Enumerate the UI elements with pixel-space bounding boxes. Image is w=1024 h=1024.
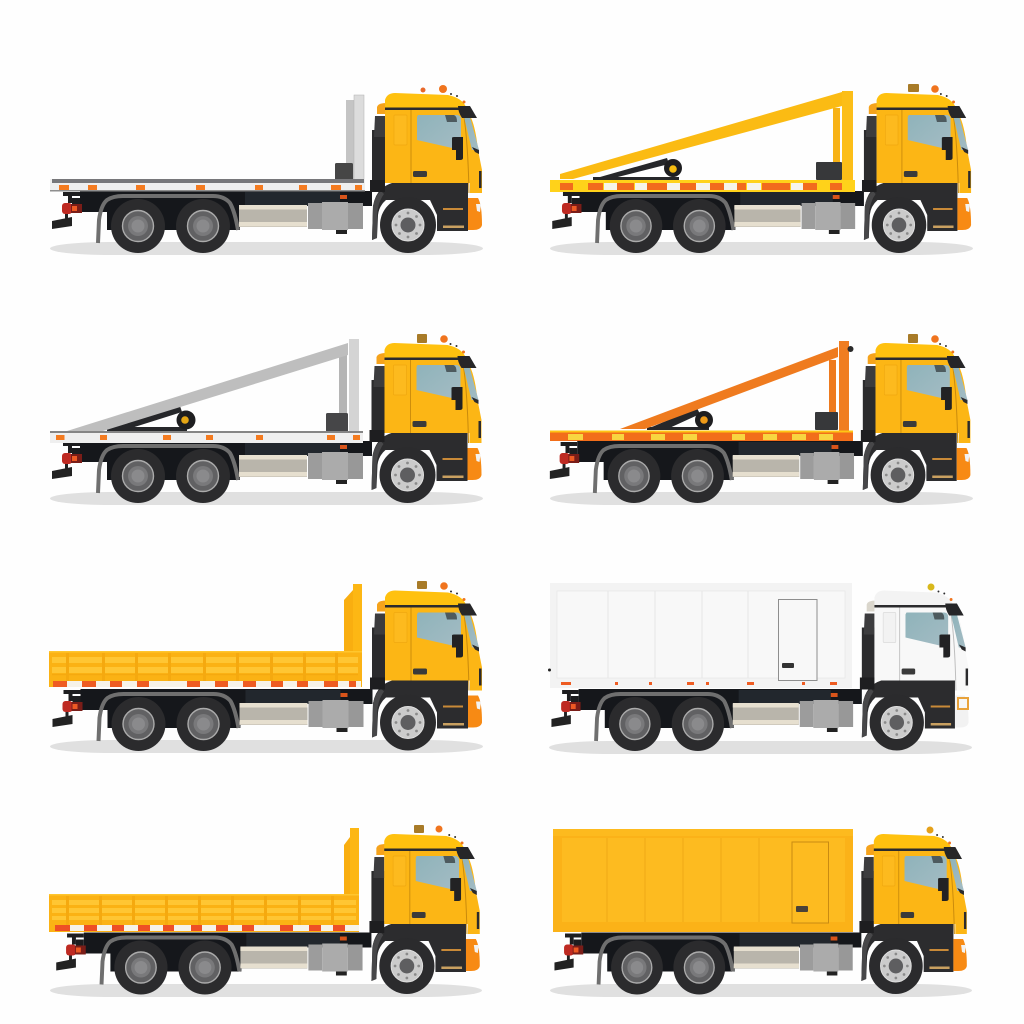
chassis and rear wheels: [551, 689, 862, 751]
truck: silver flatbed with headboard: [50, 85, 483, 255]
dropside body: [49, 584, 362, 687]
chassis and rear wheels: [552, 191, 864, 253]
chassis and rear wheels: [554, 932, 861, 994]
chassis and rear wheels: [550, 441, 863, 503]
tilt boom and deck: [550, 91, 855, 192]
ground shadow: [550, 984, 972, 997]
truck: white box van: [548, 583, 972, 754]
cab and front wheel: [860, 590, 969, 750]
tilt boom and deck: [550, 341, 854, 441]
flat deck with headboard: [50, 95, 365, 192]
cab and front wheel: [370, 93, 482, 253]
ground shadow: [50, 984, 482, 997]
chassis and rear wheels: [52, 441, 372, 503]
dropside body: [49, 828, 359, 932]
ground shadow: [50, 242, 483, 255]
roof beacons: [420, 85, 447, 93]
ground shadow: [50, 492, 483, 505]
truck: yellow tilt deck with boom: [550, 84, 973, 255]
white box body with door: [548, 583, 852, 688]
cab and front wheel: [859, 834, 967, 994]
cab and front wheel: [862, 93, 971, 253]
ground shadow: [50, 740, 483, 753]
roof beacons: [417, 334, 448, 343]
ground shadow: [549, 741, 972, 754]
truck: silver tilt deck with boom: [50, 334, 483, 505]
truck: yellow box van: [550, 826, 972, 997]
cab and front wheel: [370, 590, 482, 750]
roof beacon: [928, 584, 934, 590]
roof beacons: [908, 84, 939, 93]
truck: yellow dropside with tall headboard: [49, 581, 483, 753]
cab and front wheel: [370, 343, 482, 503]
cab and front wheel: [861, 343, 970, 503]
roof beacon: [926, 826, 934, 834]
chassis and rear wheels: [52, 689, 372, 751]
cab and front wheel: [369, 834, 480, 994]
roof beacons: [417, 581, 448, 590]
chassis and rear wheels: [52, 191, 372, 253]
tilt boom and deck: [50, 339, 363, 443]
truck: yellow dropside, lower row: [49, 825, 482, 997]
roof beacons: [908, 334, 939, 343]
truck: orange tilt deck with boom: [550, 334, 973, 505]
roof beacons: [414, 825, 442, 833]
ground shadow: [550, 492, 973, 505]
chassis and rear wheels: [56, 932, 371, 994]
yellow box body with door: [553, 829, 853, 932]
ground shadow: [550, 242, 973, 255]
front lamp: [957, 697, 969, 710]
